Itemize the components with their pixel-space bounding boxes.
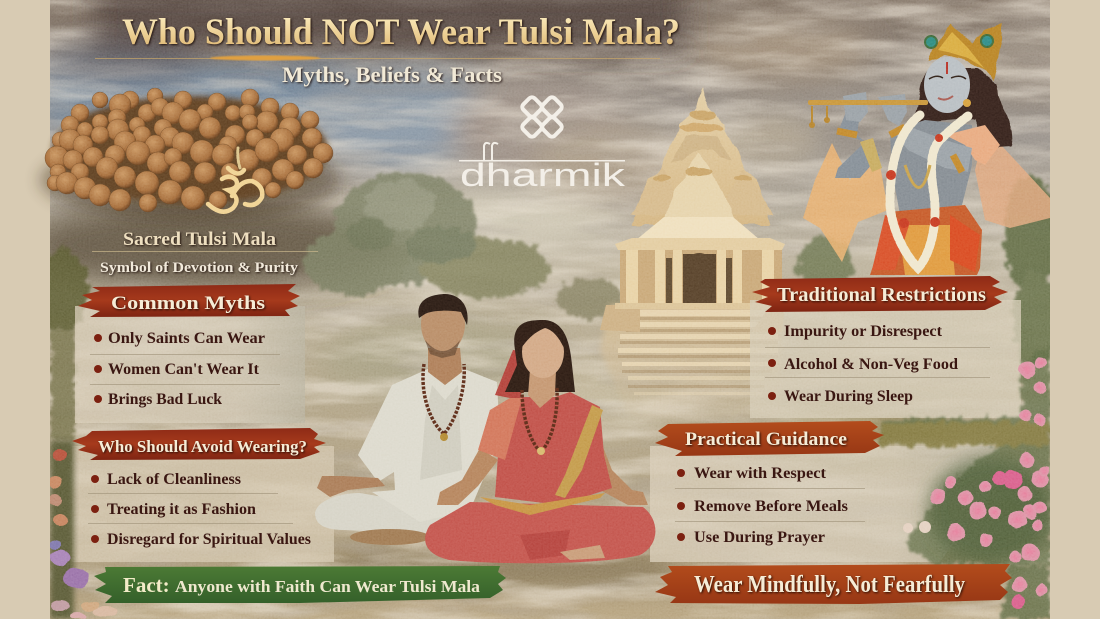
icon: om pendant — [208, 148, 262, 212]
banner: traditional restrictions — [752, 276, 1008, 312]
banner: wear mindfully: Wear Mindfully, Not Fearfully — [694, 572, 965, 598]
Krishna figure — [803, 23, 1050, 275]
woman foot — [560, 545, 605, 560]
hands — [843, 92, 907, 126]
subtitle: Myths, Beliefs & Facts — [282, 62, 502, 87]
shoulder cloth — [945, 125, 1000, 165]
man kurta — [358, 368, 500, 522]
banner: common myths: Common Myths — [111, 293, 265, 314]
trees behind the couple — [36, 172, 1057, 440]
woman arms — [437, 447, 648, 505]
arm right — [896, 125, 972, 172]
wordmark: dharmik — [460, 157, 626, 193]
panel: common myths — [75, 306, 305, 423]
woman blouse and saree top — [479, 392, 612, 505]
sleeves — [860, 138, 882, 172]
torso — [890, 120, 972, 215]
list: common myths: Only Saints Can Wear — [108, 330, 265, 347]
temple porch with pillars — [615, 217, 785, 309]
hair — [905, 68, 1011, 148]
arm left — [835, 112, 880, 178]
couple — [315, 294, 655, 563]
temple — [600, 87, 785, 420]
woman hair — [505, 320, 575, 392]
banner: who should avoid: Who Should Avoid Wearing? — [98, 437, 307, 456]
list: common myths — [90, 330, 280, 408]
temple shikhara — [630, 87, 772, 225]
banner: traditional restrictions: Traditional Restrictions — [777, 284, 986, 306]
face — [924, 57, 970, 113]
banner: fact: Fact: — [123, 573, 170, 597]
list: traditional restrictions: Wear During Sleep — [784, 388, 913, 405]
list: practical guidance: Wear with Respect — [694, 465, 827, 482]
bracelets — [837, 127, 962, 172]
banner: common myths — [78, 284, 300, 317]
necklace gold — [905, 165, 930, 188]
mala beads illustration — [40, 88, 340, 220]
list: common myths: Women Can't Wear It — [108, 361, 260, 378]
flowers right — [880, 345, 1052, 619]
text panel backgrounds — [72, 300, 1021, 562]
woman head — [528, 370, 556, 408]
man mala — [423, 364, 464, 434]
list: traditional restrictions — [765, 323, 990, 405]
banner: wear mindfully — [655, 564, 1012, 604]
list: who should avoid: Disregard for Spiritual Values — [107, 531, 311, 548]
woman veil — [495, 350, 530, 400]
caption subtitle: Symbol of Devotion & Purity — [100, 260, 299, 276]
panel: who should avoid — [72, 446, 334, 562]
list: practical guidance — [675, 465, 865, 546]
dhoti — [870, 205, 982, 275]
list: practical guidance: Remove Before Meals — [694, 498, 848, 515]
man neck and head — [428, 348, 462, 385]
woman skirt — [425, 502, 655, 563]
woman — [425, 320, 655, 563]
wordmark — [459, 143, 626, 193]
list: traditional restrictions: Impurity or Disrespect — [784, 323, 943, 340]
list: who should avoid: Treating it as Fashion — [107, 501, 256, 518]
list: who should avoid — [88, 471, 311, 548]
mala caption — [92, 229, 318, 276]
dupatta left — [803, 143, 888, 262]
dupatta right — [975, 128, 1050, 228]
woman mala — [522, 388, 557, 452]
banner: practical guidance — [655, 421, 884, 456]
list: common myths: Brings Bad Luck — [108, 391, 222, 408]
man arm — [317, 476, 385, 497]
crown — [928, 23, 1002, 80]
banner: fact: Anyone with Faith Can Wear Tulsi Mala — [175, 577, 481, 596]
list: who should avoid: Lack of Cleanliness — [107, 471, 241, 488]
caption title: Sacred Tulsi Mala — [123, 229, 277, 250]
panel: practical guidance — [650, 446, 1000, 562]
brand logo — [459, 96, 626, 193]
panel: traditional restrictions — [750, 300, 1021, 418]
man — [315, 294, 500, 545]
title rule — [95, 58, 660, 59]
banner: fact — [94, 566, 506, 603]
man lower robe — [315, 493, 470, 540]
garland — [890, 115, 968, 268]
list: practical guidance: Use During Prayer — [694, 529, 825, 546]
temple steps — [600, 305, 785, 420]
banner: who should avoid — [72, 428, 326, 460]
flowers left — [49, 440, 117, 619]
icon: lotus knot — [521, 96, 563, 138]
list: traditional restrictions: Alcohol & Non-Veg Food — [784, 356, 958, 373]
flute — [808, 100, 928, 128]
title — [95, 12, 680, 87]
heading: Who Should NOT Wear Tulsi Mala? — [122, 12, 680, 53]
banner: practical guidance: Practical Guidance — [685, 429, 847, 450]
